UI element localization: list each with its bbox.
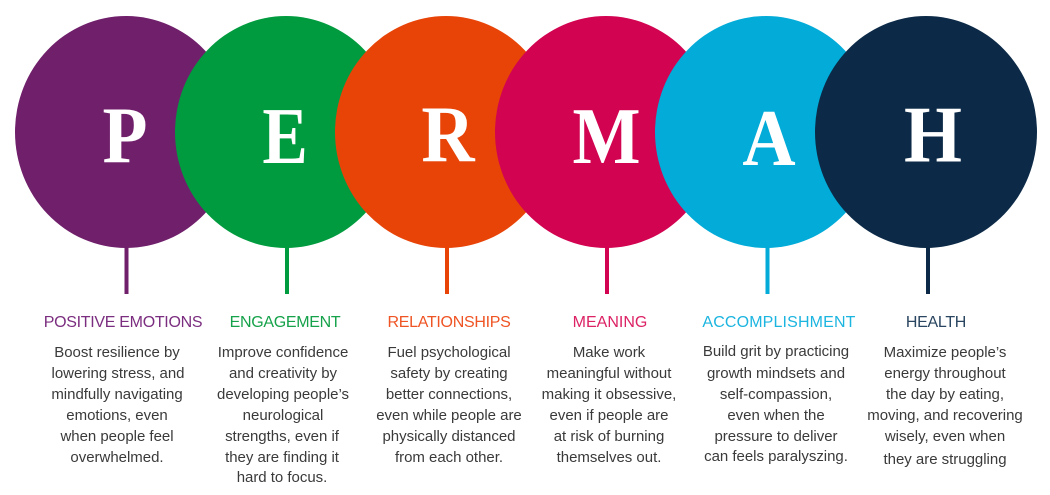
description: health: energy throughout (884, 365, 1007, 382)
column: relationships (376, 314, 522, 466)
description: positive emotions: lowering stress, and (52, 365, 184, 382)
description: positive emotions: Boost resilience by (54, 344, 180, 361)
stem: A (766, 245, 770, 294)
description: meaning: even if people are (550, 407, 668, 424)
description: positive emotions: emotions, even (66, 407, 168, 424)
description: health: moving, and recovering (867, 407, 1023, 424)
heading: positive emotions: POSITIVE EMOTIONS (44, 314, 202, 331)
description: accomplishment: pressure to deliver (714, 428, 838, 445)
circle H: health (815, 16, 1037, 248)
heading: relationships: RELATIONSHIPS (388, 314, 510, 331)
description: relationships: better connections, (386, 386, 512, 403)
description: engagement: neurological (243, 407, 323, 424)
description: engagement: strengths, even if (225, 428, 340, 445)
description: meaning: themselves out. (557, 449, 661, 466)
description: positive emotions: mindfully navigating (51, 386, 183, 403)
heading: meaning: MEANING (573, 314, 647, 331)
heading: health: HEALTH (906, 314, 966, 331)
description: positive emotions: overwhelmed. (70, 449, 164, 466)
circle A: accomplishment (655, 16, 877, 248)
stem: M (605, 245, 609, 294)
circle P: positive emotions (15, 16, 237, 248)
circle E: engagement: E (262, 92, 308, 181)
stem: R (445, 245, 449, 294)
circle H: health: H (904, 90, 962, 179)
column: positive emotions (44, 314, 202, 466)
stem: E (285, 245, 289, 294)
description: engagement: developing people’s (217, 386, 349, 403)
description: engagement: Improve confidence (218, 344, 348, 361)
description: accomplishment: growth mindsets and (707, 365, 845, 382)
description: meaning: at risk of burning (554, 428, 664, 445)
description: meaning: meaningful without (547, 365, 672, 382)
description: accomplishment: Build grit by practicing (703, 343, 849, 360)
description: engagement: they are finding it (225, 449, 340, 466)
description: health: Maximize people’s (884, 344, 1006, 361)
circle E: engagement (175, 16, 397, 248)
circle R: relationships (335, 16, 557, 248)
column: engagement (217, 314, 349, 486)
description: relationships: Fuel psychological (387, 344, 511, 361)
column: accomplishment (702, 314, 856, 465)
heading: accomplishment: ACCOMPLISHMENT (702, 314, 856, 331)
description: engagement: and creativity by (229, 365, 338, 382)
description: relationships: even while people are (376, 407, 522, 424)
circle M: meaning: M (572, 91, 641, 181)
circle R: relationships: R (421, 89, 476, 179)
description: health: wisely, even when (884, 428, 1005, 445)
circle A: accomplishment: A (742, 93, 796, 183)
description: positive emotions: when people feel (59, 428, 174, 445)
description: meaning: Make work (573, 344, 646, 361)
column: health (867, 314, 1023, 468)
stem: H (926, 245, 930, 294)
stem: P (124, 245, 128, 294)
description: relationships: from each other. (395, 449, 503, 466)
description: relationships: physically distanced (382, 428, 516, 445)
description: accomplishment: self-compassion, (720, 386, 832, 403)
description: meaning: making it obsessive, (542, 386, 676, 403)
description: accomplishment: even when the (727, 407, 825, 424)
description: accomplishment: can feels paralyszing. (704, 448, 848, 465)
description: relationships: safety by creating (390, 365, 508, 382)
column: meaning (542, 314, 676, 466)
description: engagement: hard to focus. (237, 469, 327, 486)
heading: engagement: ENGAGEMENT (230, 314, 341, 331)
description: health: they are struggling (883, 451, 1007, 468)
description: health: the day by eating, (886, 386, 1004, 403)
circle P: positive emotions: P (102, 90, 148, 180)
circle M: meaning (495, 16, 717, 248)
